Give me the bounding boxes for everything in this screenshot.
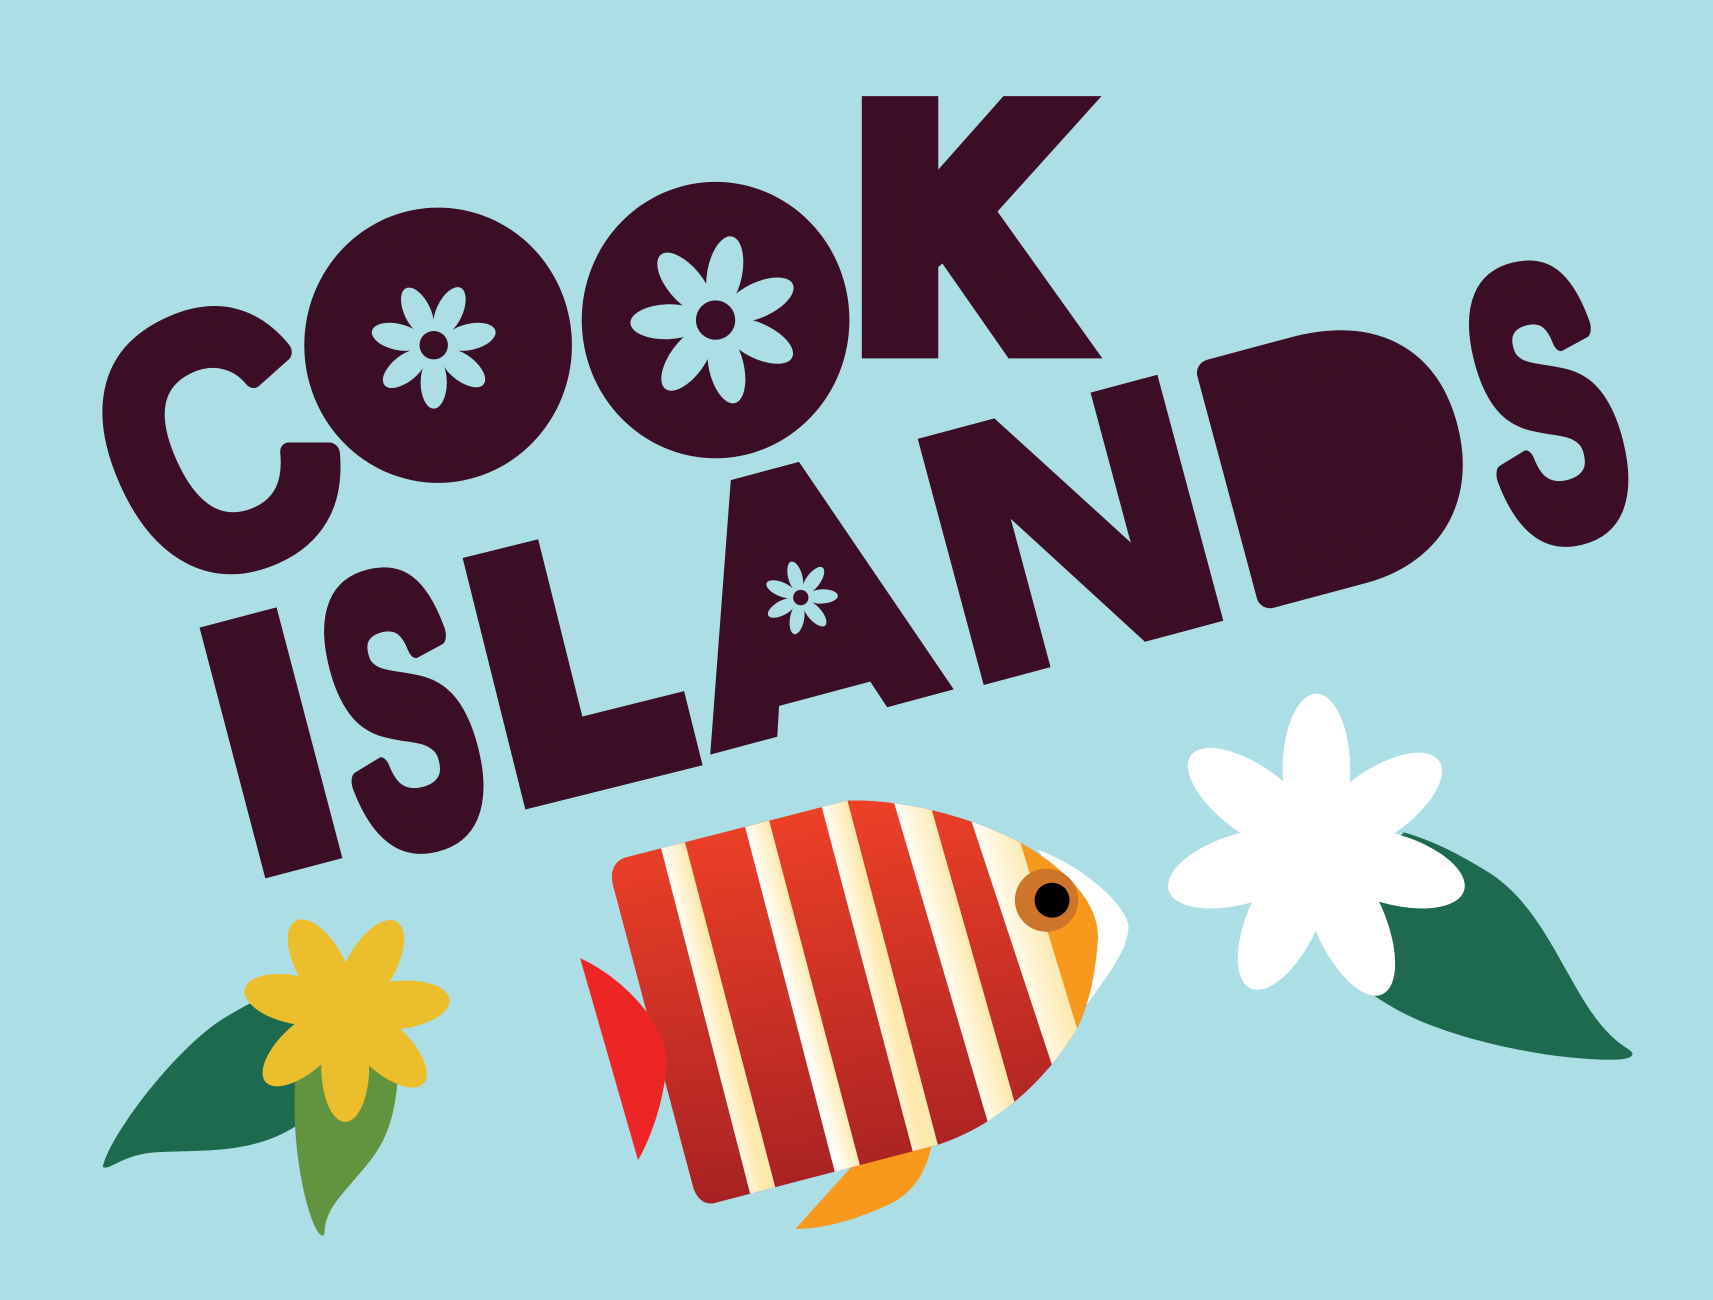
word: COOK [38, 47, 1069, 667]
letter D: D [1170, 244, 1506, 669]
word: ISLANDS [162, 186, 1661, 950]
letter K: K [860, 47, 1069, 408]
letter S: S [288, 493, 516, 929]
fish body [601, 792, 1114, 1213]
illustration: striped fish [580, 792, 1129, 1229]
icon: flower in first O [369, 282, 498, 409]
letter N: N [885, 306, 1256, 752]
stripes [661, 797, 1078, 1199]
icon: flower in A [764, 560, 838, 635]
fish bottom fin [795, 1145, 932, 1229]
icon: flower in second O [630, 233, 800, 407]
fish tail [580, 958, 666, 1160]
title: Cook Islands [38, 47, 1661, 950]
illustration: white flower with leaf [1159, 694, 1632, 1060]
orange face [1012, 838, 1098, 1047]
illustration: Cook Islands poster [102, 96, 1632, 1236]
letter C: C [38, 220, 396, 667]
yellow flower [240, 909, 452, 1122]
letter O with flower: O [265, 131, 611, 559]
dark green leaf [103, 989, 328, 1168]
fish eye [1015, 868, 1078, 932]
light green leaf [294, 1049, 399, 1236]
dark green leaf [1316, 832, 1632, 1060]
letter S: S [1433, 186, 1661, 622]
letter A with flower: A [632, 378, 965, 815]
fish snout [1038, 850, 1129, 1007]
letter I: I [162, 534, 379, 950]
white flower [1159, 694, 1474, 1009]
letter L: L [451, 470, 704, 855]
illustration: yellow flower with leaves [103, 909, 452, 1236]
letter O with large flower: O [542, 106, 889, 534]
